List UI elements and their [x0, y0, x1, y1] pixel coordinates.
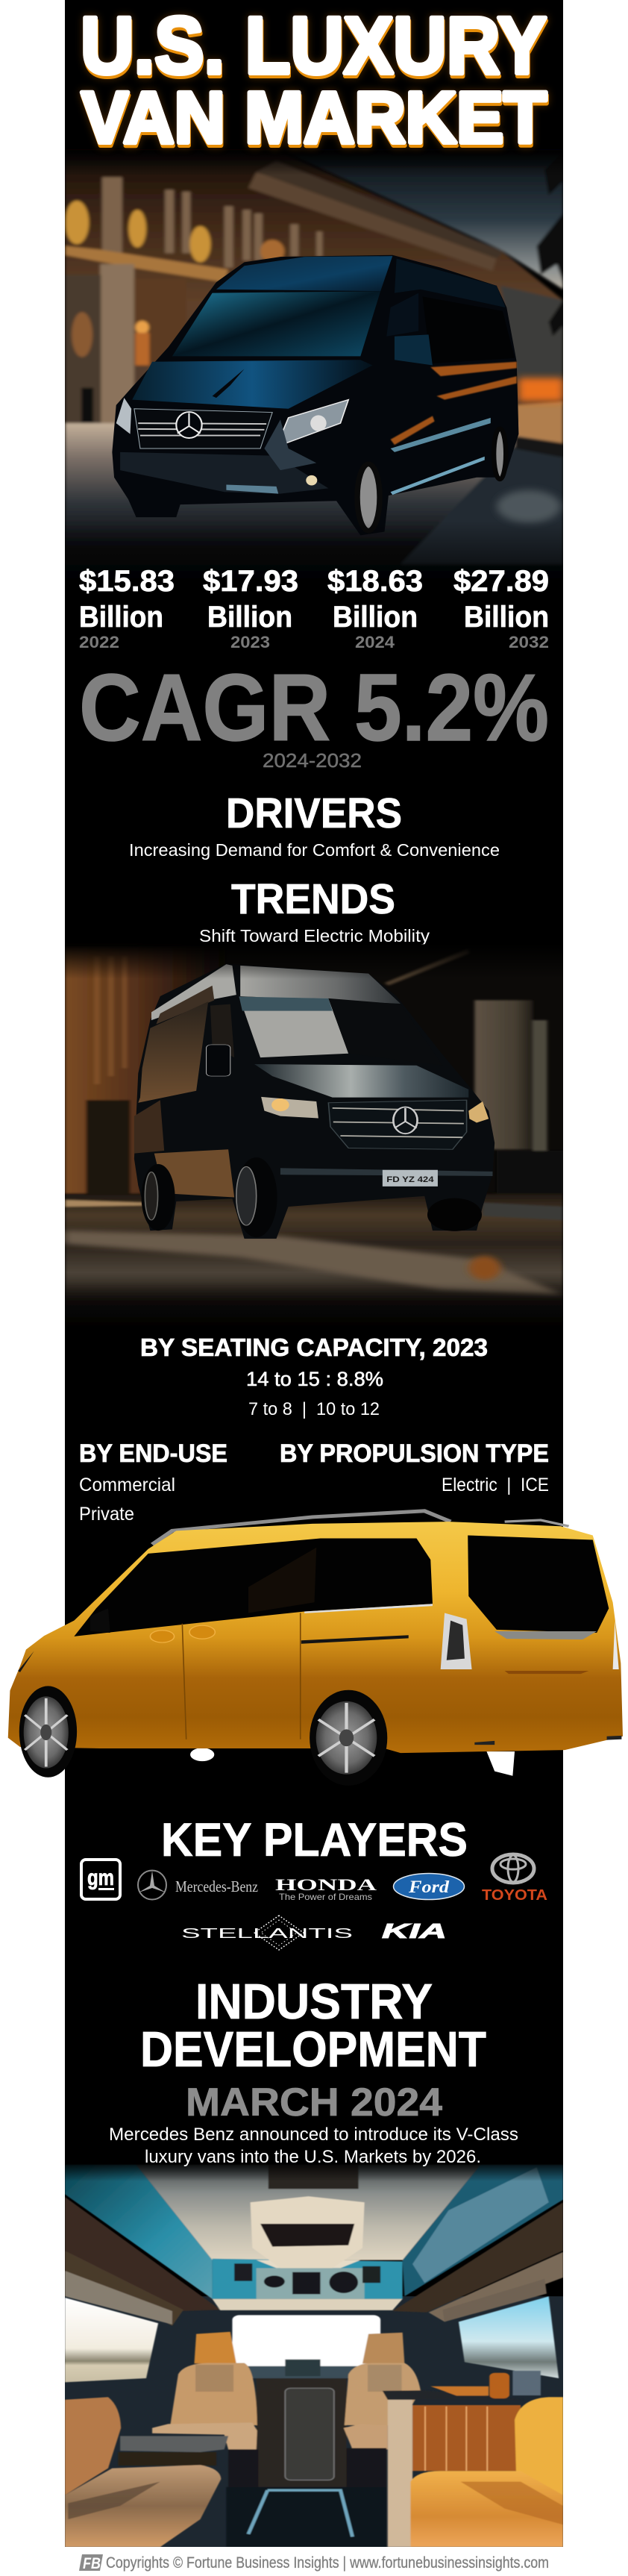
by end-use segment: [79, 1439, 227, 1525]
market size values by year: [79, 565, 549, 651]
key player logos: [81, 1854, 547, 1950]
end-use private: Private: [79, 1504, 134, 1525]
trends text: Shift Toward Electric Mobility: [199, 926, 430, 945]
drivers text: Increasing Demand for Comfort & Convenience: [129, 840, 500, 860]
value 2032: $27.89: [453, 565, 549, 598]
value 2032: Billion: [464, 601, 549, 634]
logo: Kia: KIA: [382, 1919, 447, 1942]
hero image: black luxury van in front of a classical building: [65, 150, 563, 601]
value 2024: 2024: [355, 633, 395, 651]
by seating capacity segment: [140, 1334, 488, 1419]
value 2022: [79, 565, 175, 651]
propulsion heading: BY PROPULSION TYPE: [280, 1439, 549, 1468]
value 2022: Billion: [79, 601, 163, 634]
value 2024: [327, 565, 423, 651]
logo: Mercedes-Benz: Mercedes-Benz: [175, 1878, 258, 1895]
value 2023: Billion: [207, 601, 292, 634]
value 2022: $15.83: [79, 565, 175, 598]
industry development heading: INDUSTRY: [195, 1974, 433, 2030]
by propulsion type segment: [280, 1439, 549, 1495]
value 2024: Billion: [333, 601, 418, 634]
second image: dark van on a wet street: [65, 944, 563, 1337]
end-use heading: BY END-USE: [79, 1439, 227, 1468]
logo: Honda: [275, 1875, 377, 1902]
value 2032: [453, 565, 549, 651]
logo: Ford: Ford: [408, 1878, 450, 1896]
logo: Toyota: [482, 1854, 547, 1904]
development description: [109, 2125, 518, 2167]
second van body: [134, 963, 494, 1239]
footer logo: FB: [83, 2555, 101, 2572]
third image: luxury van interior: [65, 2160, 563, 2547]
hero van body: [112, 255, 518, 535]
CAGR headline: CAGR 5.2%: [79, 654, 549, 760]
seating others: 7 to 8 | 10 to 12: [248, 1399, 380, 1419]
industry development heading: DEVELOPMENT: [140, 2022, 486, 2078]
title: U.S. Luxury Van Market: VAN MARKET: [81, 77, 547, 158]
white footer strip: [0, 2547, 628, 2576]
seating heading: BY SEATING CAPACITY, 2023: [140, 1334, 488, 1361]
value 2032: 2032: [509, 633, 549, 651]
trends heading: TRENDS: [231, 875, 395, 923]
logo: GM: [81, 1860, 120, 1899]
propulsion values: Electric | ICE: [442, 1475, 549, 1495]
title: U.S. Luxury Van Market: [81, 0, 547, 158]
value 2023: 2023: [230, 633, 270, 651]
drivers heading: DRIVERS: [226, 790, 402, 837]
value 2023: $17.93: [203, 565, 298, 598]
licence plate: FD YZ 424: [386, 1175, 434, 1184]
logo: Honda: The Power of Dreams: [279, 1892, 372, 1902]
development description: Mercedes Benz announced to introduce its V-Class: [109, 2125, 518, 2145]
yellow luxury van, side-rear view: [8, 1511, 623, 1786]
logo: GM: gm: [87, 1866, 114, 1890]
end-use commercial: Commercial: [79, 1475, 175, 1495]
title: U.S. Luxury Van Market: U.S. LUXURY: [81, 0, 547, 90]
industry development heading: [140, 1974, 486, 2078]
development date: MARCH 2024: [186, 2081, 443, 2125]
logo: Honda: HONDA: [275, 1875, 377, 1894]
logo: Stellantis: [181, 1916, 353, 1950]
black background panel: [65, 0, 563, 2547]
logo: Toyota: TOYOTA: [482, 1887, 547, 1904]
copyright line: Copyrights © Fortune Business Insights | www.fortunebusinessinsights.com: [106, 2554, 549, 2572]
logo: Mercedes-Benz: [138, 1870, 258, 1900]
development description: luxury vans into the U.S. Markets by 2026.: [145, 2147, 481, 2167]
key players heading: KEY PLAYERS: [161, 1814, 468, 1866]
seating share: 14 to 15 : 8.8%: [246, 1368, 383, 1390]
logo: Stellantis: STELLANTIS: [181, 1926, 353, 1941]
CAGR period: 2024-2032: [263, 749, 362, 772]
value 2024: $18.63: [327, 565, 423, 598]
value 2023: [203, 565, 298, 651]
value 2022: 2022: [79, 633, 119, 651]
logo: Ford: [394, 1873, 464, 1900]
